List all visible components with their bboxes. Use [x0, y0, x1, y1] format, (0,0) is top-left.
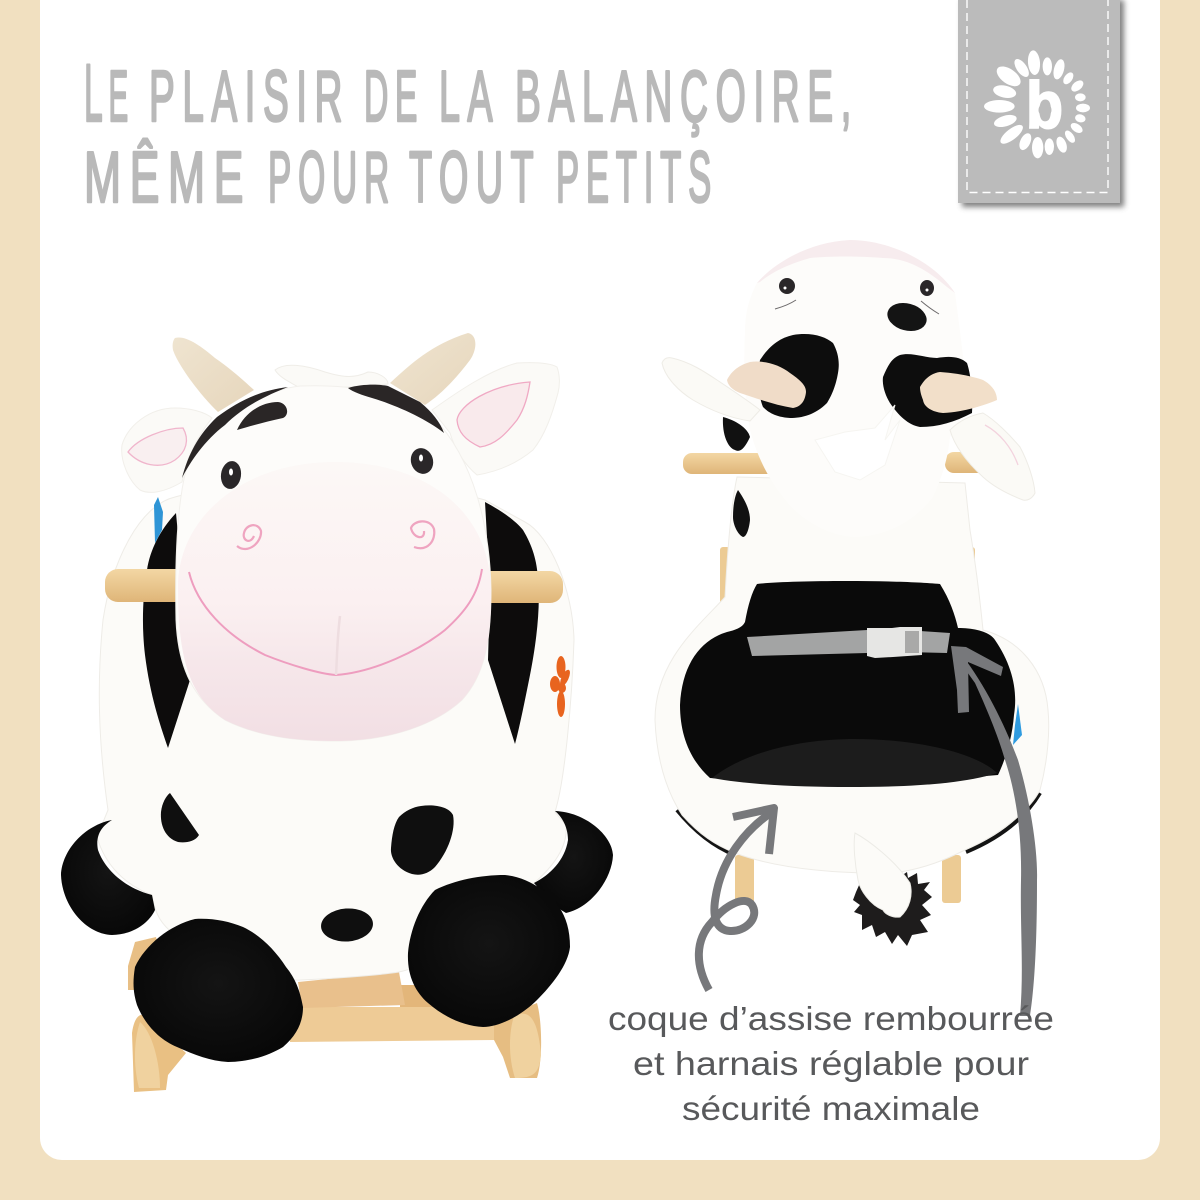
forehead pink: [757, 240, 955, 293]
title: TOUT: [409, 138, 541, 218]
eyes: [219, 460, 243, 490]
tail tuft: [853, 872, 932, 946]
head patches: [182, 385, 444, 478]
title: PETITS: [556, 138, 718, 218]
cow body: [97, 477, 574, 980]
wooden handle bar: [105, 569, 563, 603]
left ear: [122, 408, 212, 492]
eyes top: [779, 278, 795, 294]
forelock: [275, 365, 388, 388]
pink muzzle: [178, 462, 491, 741]
side patch right: [485, 502, 539, 744]
left cow: front view rocking toy: [61, 333, 613, 1092]
belly spots: [161, 793, 454, 943]
caption: coque d’assise rembourrée: [608, 1000, 1054, 1037]
title: MÊME: [84, 138, 252, 218]
right ear: [432, 363, 559, 475]
blue label: [154, 497, 163, 543]
caption: [608, 1000, 1054, 1127]
logo sunflower: [984, 50, 1090, 158]
title: BALANÇOIRE,: [515, 57, 859, 137]
front right foot: [408, 875, 570, 1027]
rear left foot: [61, 820, 155, 935]
back patches: [758, 334, 839, 418]
front left foot: [134, 919, 303, 1062]
title: DE: [364, 57, 424, 137]
brand tag with logo: b: [1026, 68, 1063, 142]
brand tag with logo: [958, 0, 1124, 207]
title: PLAISIR: [149, 57, 350, 137]
title: LA: [439, 57, 500, 137]
smile marks: [775, 300, 939, 314]
bar: [683, 453, 778, 474]
horns: [727, 362, 806, 408]
right cow: view from above showing seat: [655, 240, 1049, 946]
neck and shell: [655, 477, 1049, 873]
seat rim: [677, 793, 1040, 855]
arrow: to padded seat: [699, 808, 774, 990]
head: [744, 240, 967, 537]
seat cushion: [712, 739, 997, 787]
wooden rocker: [128, 937, 541, 1092]
caption: et harnais réglable pour: [633, 1045, 1029, 1082]
right horn: [390, 333, 475, 405]
title: LE: [84, 48, 134, 139]
muzzle spot: [884, 299, 930, 335]
side spot: [733, 490, 750, 537]
rear wooden legs: [720, 547, 975, 903]
left horn: [173, 337, 254, 412]
black side spots behind: [723, 417, 750, 451]
forelock tuft: [815, 405, 900, 480]
blue label: [1013, 704, 1022, 745]
flower: [550, 656, 572, 717]
tail: [854, 833, 911, 917]
smile: [189, 569, 482, 675]
title: POUR: [268, 138, 396, 218]
rear right foot: [534, 811, 613, 913]
ears: [662, 358, 760, 421]
side patch left: [143, 513, 190, 748]
seat black cushion back: [680, 581, 1015, 787]
buckle: [867, 627, 922, 658]
harness strap: [747, 627, 950, 658]
head: [176, 386, 491, 741]
nostrils: [237, 521, 434, 549]
arrow: to harness: [951, 646, 1037, 1016]
caption: sécurité maximale: [682, 1090, 980, 1127]
title: [84, 48, 859, 218]
